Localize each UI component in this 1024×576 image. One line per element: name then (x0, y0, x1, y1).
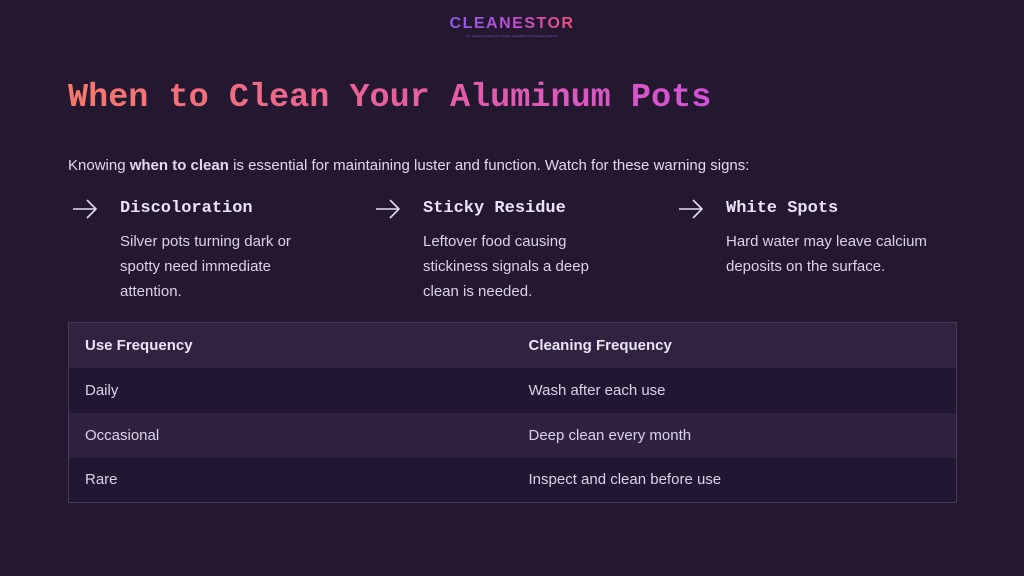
icon: arrow (73, 199, 97, 219)
table: frequency (68, 322, 957, 503)
feature: white spots: Hard water may leave calcium deposits on the surface. (726, 233, 927, 275)
feature: white spots (679, 199, 927, 275)
table: frequency: Use Frequency (85, 337, 193, 354)
table: frequency: Inspect and clean before use (528, 471, 721, 488)
table: frequency: Daily (85, 382, 118, 398)
intro text: Knowing when to clean is essential for maintaining luster and function. Watch for these warning signs: (68, 157, 749, 174)
feature: discoloration: Silver pots turning dark or spotty need immediate attention. (120, 233, 291, 300)
icon: arrow (376, 199, 400, 219)
logo: CLEANESTOR (450, 15, 574, 32)
icon: arrow (679, 199, 703, 219)
feature: sticky residue: Leftover food causing stickiness signals a deep clean is needed. (423, 233, 589, 300)
title: When to Clean Your Aluminum Pots (68, 79, 711, 117)
table: frequency: Wash after each use (528, 382, 666, 398)
table: frequency: Occasional (85, 426, 159, 444)
feature: discoloration (73, 199, 291, 300)
logo: Pro Cleaning Guides And Service Journalism From Cleaning Nations (466, 34, 558, 38)
table: frequency: Rare (85, 471, 118, 488)
feature: sticky residue (376, 199, 589, 300)
feature: sticky residue: Sticky Residue (423, 199, 566, 218)
table: frequency: Cleaning Frequency (528, 337, 672, 354)
table: frequency: Deep clean every month (528, 426, 691, 444)
feature: white spots: White Spots (726, 199, 838, 218)
feature: discoloration: Discoloration (120, 199, 253, 218)
